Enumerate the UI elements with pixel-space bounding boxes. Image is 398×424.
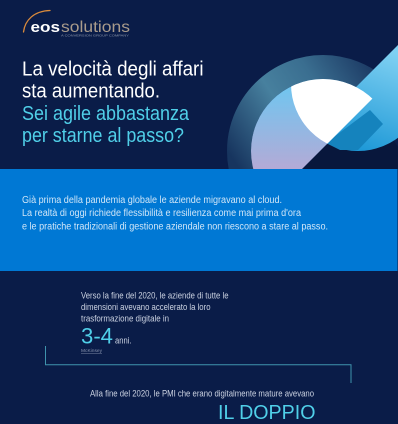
- light blue circle segment: [328, 45, 398, 151]
- logo arc: [24, 10, 50, 32]
- stat description: Alla fine del 2020, le PMI che erano digitalmente mature avevano: [90, 388, 314, 398]
- shadow below disc: [304, 141, 398, 169]
- logo: eos solutions: [24, 10, 130, 38]
- outer ring: [227, 55, 374, 169]
- stat highlight: IL DOPPIO: [218, 401, 316, 424]
- logo tagline: A CONVERSION GROUP COMPANY: [61, 34, 129, 38]
- stat number: 3-4: [81, 324, 113, 348]
- white lens: [291, 79, 372, 144]
- intro text: e le pratiche tradizionali di gestione aziendale non riescono a stare al passo.: [22, 222, 328, 232]
- hero graphic: overlapping circles: [227, 45, 398, 169]
- panel: blue intro band: [0, 169, 398, 271]
- stat description: Verso la fine del 2020, le aziende di tutte le: [81, 290, 228, 300]
- intro text: Già prima della pandemia globale le aziende migravano al cloud.: [22, 195, 282, 206]
- inner gradient disc: [251, 79, 372, 169]
- logo wordmark: eos: [30, 19, 60, 36]
- stat description: trasformazione digitale in: [81, 314, 169, 324]
- logo: eos solutions: solutions: [61, 19, 130, 36]
- stat description: [81, 290, 228, 324]
- intro text: [22, 195, 328, 232]
- source: McKinsey: McKinsey: [81, 348, 103, 353]
- stat: il doppio: [90, 388, 316, 424]
- stat description: dimensioni avevano accelerato la loro: [81, 302, 210, 312]
- title: per starne al passo?: [22, 125, 184, 147]
- title: sta aumentando.: [22, 80, 160, 102]
- title: [22, 58, 204, 147]
- dark diamond on blue segment: [326, 110, 383, 150]
- title: La velocità degli affari: [22, 58, 204, 80]
- connector bracket: [46, 346, 351, 383]
- title: Sei agile abbastanza: [22, 103, 190, 125]
- stat: 3-4 anni: [81, 290, 228, 353]
- intro text: La realtà di oggi richiede flessibilità e resilienza come mai prima d'ora: [22, 208, 301, 219]
- stat unit: anni.: [115, 336, 132, 346]
